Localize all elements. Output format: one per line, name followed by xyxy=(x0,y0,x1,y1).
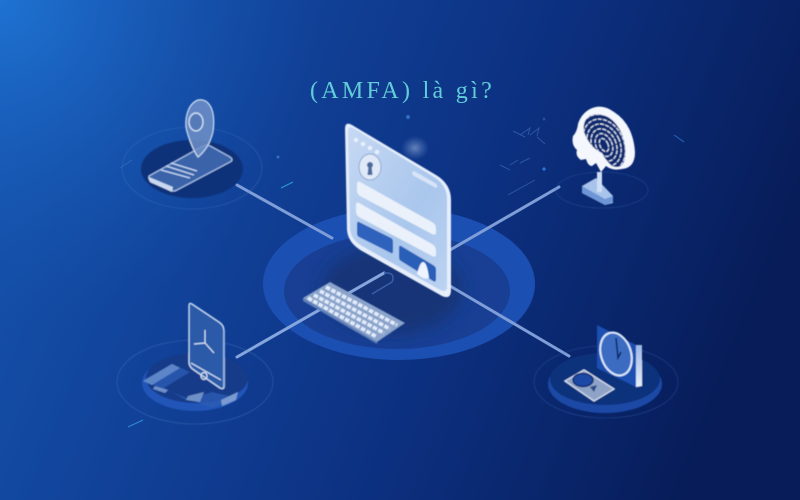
primary button xyxy=(357,222,393,253)
login panel xyxy=(345,124,451,297)
map pin xyxy=(186,100,214,157)
node: location phone xyxy=(122,100,262,209)
tech decoration right xyxy=(500,128,545,195)
central platform xyxy=(263,208,535,360)
lock badge xyxy=(359,154,381,180)
sparkle xyxy=(401,136,429,160)
tech dots and dashes xyxy=(120,115,684,427)
cable hook xyxy=(372,273,393,294)
secondary button xyxy=(399,246,436,282)
tilted slab xyxy=(143,364,238,408)
brain body xyxy=(572,107,635,172)
square clock xyxy=(597,325,636,387)
token card xyxy=(565,370,614,401)
input field 1 xyxy=(357,181,436,235)
connector: top right xyxy=(450,187,559,250)
phone xyxy=(189,303,224,389)
connector: top left xyxy=(237,185,332,238)
node: fingerprint brain xyxy=(556,106,648,208)
input field 2 xyxy=(356,202,436,257)
bell icon xyxy=(417,262,429,278)
keyboard xyxy=(303,282,405,344)
title: (AMFA) là gì? xyxy=(310,78,495,104)
connector: bottom left xyxy=(237,273,384,357)
node: clock and token xyxy=(534,325,678,418)
phone xyxy=(149,145,232,191)
window dots xyxy=(354,138,379,154)
fingerprint lines xyxy=(583,114,626,167)
connector: bottom right xyxy=(450,286,569,356)
node: clock phone xyxy=(117,303,273,424)
stand xyxy=(582,178,613,205)
header bar xyxy=(412,171,437,188)
